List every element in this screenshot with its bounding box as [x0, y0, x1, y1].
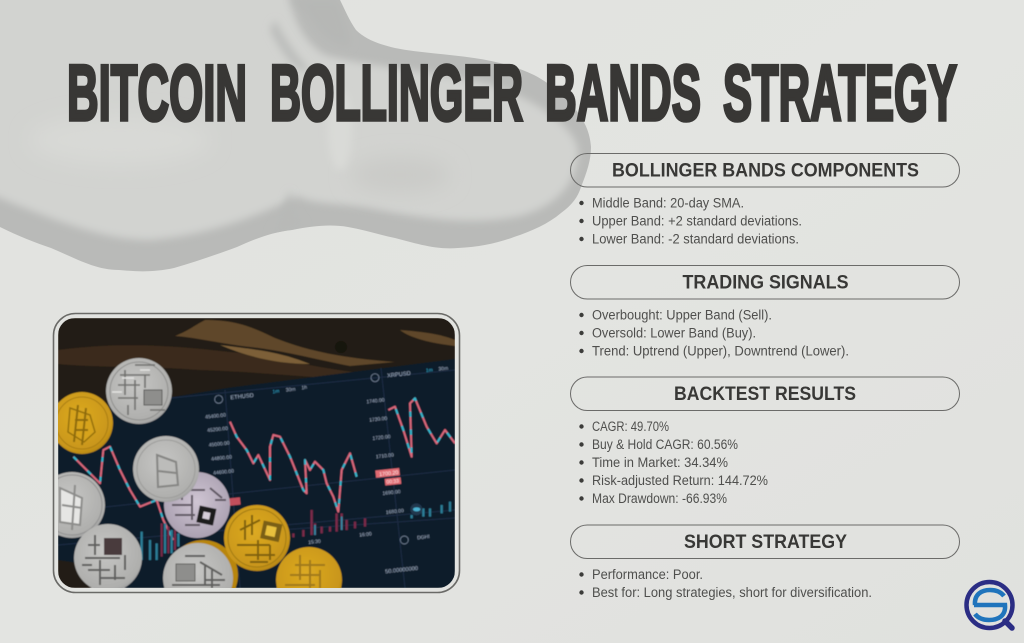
price labels: 1680.00	[386, 508, 404, 516]
price labels: 1730.00	[369, 416, 388, 424]
price labels	[205, 366, 449, 575]
coin: gold left	[51, 392, 113, 454]
bullet list: components	[579, 196, 802, 246]
panel: Bollinger Bands components	[570, 154, 960, 246]
price labels: 00:33	[386, 478, 400, 486]
price labels: 1m	[272, 389, 280, 395]
photo: crypto coins on trading chart screen	[58, 318, 455, 588]
coin: gold bottom right	[275, 546, 343, 588]
coin: silver top	[106, 358, 172, 424]
bullet list: backtest results	[579, 419, 768, 506]
section heading: trading signals: TRADING SIGNALS	[682, 272, 848, 294]
bullet list: trading signals: Trend: Uptrend (Upper), Downtrend (Lower).	[592, 344, 849, 358]
bullet list: backtest results: Max Drawdown: -66.93%	[592, 491, 727, 506]
wooden table	[58, 318, 455, 406]
title: BOLLINGER	[270, 48, 523, 137]
price labels: 1700.20	[379, 470, 399, 478]
price labels: DGHI	[417, 534, 430, 541]
price labels: 1m	[426, 367, 433, 374]
price labels: 1h	[301, 385, 308, 391]
section heading: components: BOLLINGER BANDS COMPONENTS	[612, 160, 919, 182]
coin: silver bottom left	[74, 524, 142, 592]
coin: silver bottom centre	[162, 542, 234, 588]
price labels: 30m	[438, 366, 449, 373]
bullet list: short strategy: Performance: Poor.	[592, 567, 703, 582]
bullet list: components: Middle Band: 20-day SMA.	[592, 196, 744, 210]
price labels: 45200.00	[207, 426, 228, 434]
price labels: XRPUSD	[387, 371, 411, 379]
panel: short strategy	[570, 525, 960, 600]
price labels: 1720.00	[372, 434, 391, 442]
bullet list: backtest results: Risk-adjusted Return: 144.72%	[592, 473, 768, 488]
price labels: 16:00	[359, 531, 372, 539]
background liquid blob	[0, 0, 591, 271]
price labels: 45400.00	[205, 412, 226, 421]
section heading: backtest results: BACKTEST RESULTS	[674, 384, 856, 405]
icon: magnifier S logo	[966, 582, 1012, 628]
title	[67, 48, 957, 137]
price labels: 1690.00	[382, 489, 401, 497]
bullet list: components: Upper Band: +2 standard deviations.	[592, 214, 802, 228]
coin: lilac	[164, 472, 230, 538]
photo frame	[54, 314, 460, 592]
bullet list: backtest results: Buy & Hold CAGR: 60.56%	[592, 437, 738, 452]
section heading: short strategy: SHORT STRATEGY	[684, 532, 847, 553]
panel: backtest results	[570, 377, 960, 506]
bullet list: trading signals: Oversold: Lower Band (Buy).	[592, 326, 756, 340]
bullet list: components: Lower Band: -2 standard deviations.	[592, 232, 799, 246]
bullet list: backtest results: Time in Market: 34.34%	[592, 455, 728, 470]
candlestick price lines	[73, 398, 455, 560]
price labels: ETHUSD	[230, 393, 254, 401]
price labels: 50.00000000	[385, 566, 418, 575]
price labels: 45000.00	[209, 440, 230, 449]
price labels: 44600.00	[213, 468, 234, 477]
trading screen	[58, 359, 455, 588]
title: BANDS	[545, 48, 701, 137]
section heading: components	[570, 154, 960, 187]
price labels: 1710.00	[376, 452, 394, 460]
section heading: backtest results	[570, 377, 960, 410]
coin: silver left	[58, 471, 106, 539]
bullet list: short strategy	[579, 567, 872, 600]
section heading: trading signals	[570, 266, 960, 299]
section heading: short strategy	[570, 525, 960, 558]
price labels: 15:30	[308, 539, 321, 546]
panel: trading signals	[570, 266, 960, 358]
bullet list: trading signals: Overbought: Upper Band (Sell).	[592, 308, 772, 322]
title: BITCOIN	[67, 48, 247, 137]
price labels: 44800.00	[211, 454, 232, 463]
bullet list: trading signals	[579, 308, 849, 358]
coin: gold stacked behind silver	[182, 539, 239, 588]
price labels: 1740.00	[366, 397, 385, 405]
coin: gold centre	[224, 505, 290, 571]
coin: silver centre	[133, 436, 199, 502]
bullet list: short strategy: Best for: Long strategies, short for diversification.	[592, 585, 872, 600]
price labels: 30m	[286, 387, 296, 394]
bullet list: backtest results: CAGR: 49.70%	[592, 419, 669, 434]
